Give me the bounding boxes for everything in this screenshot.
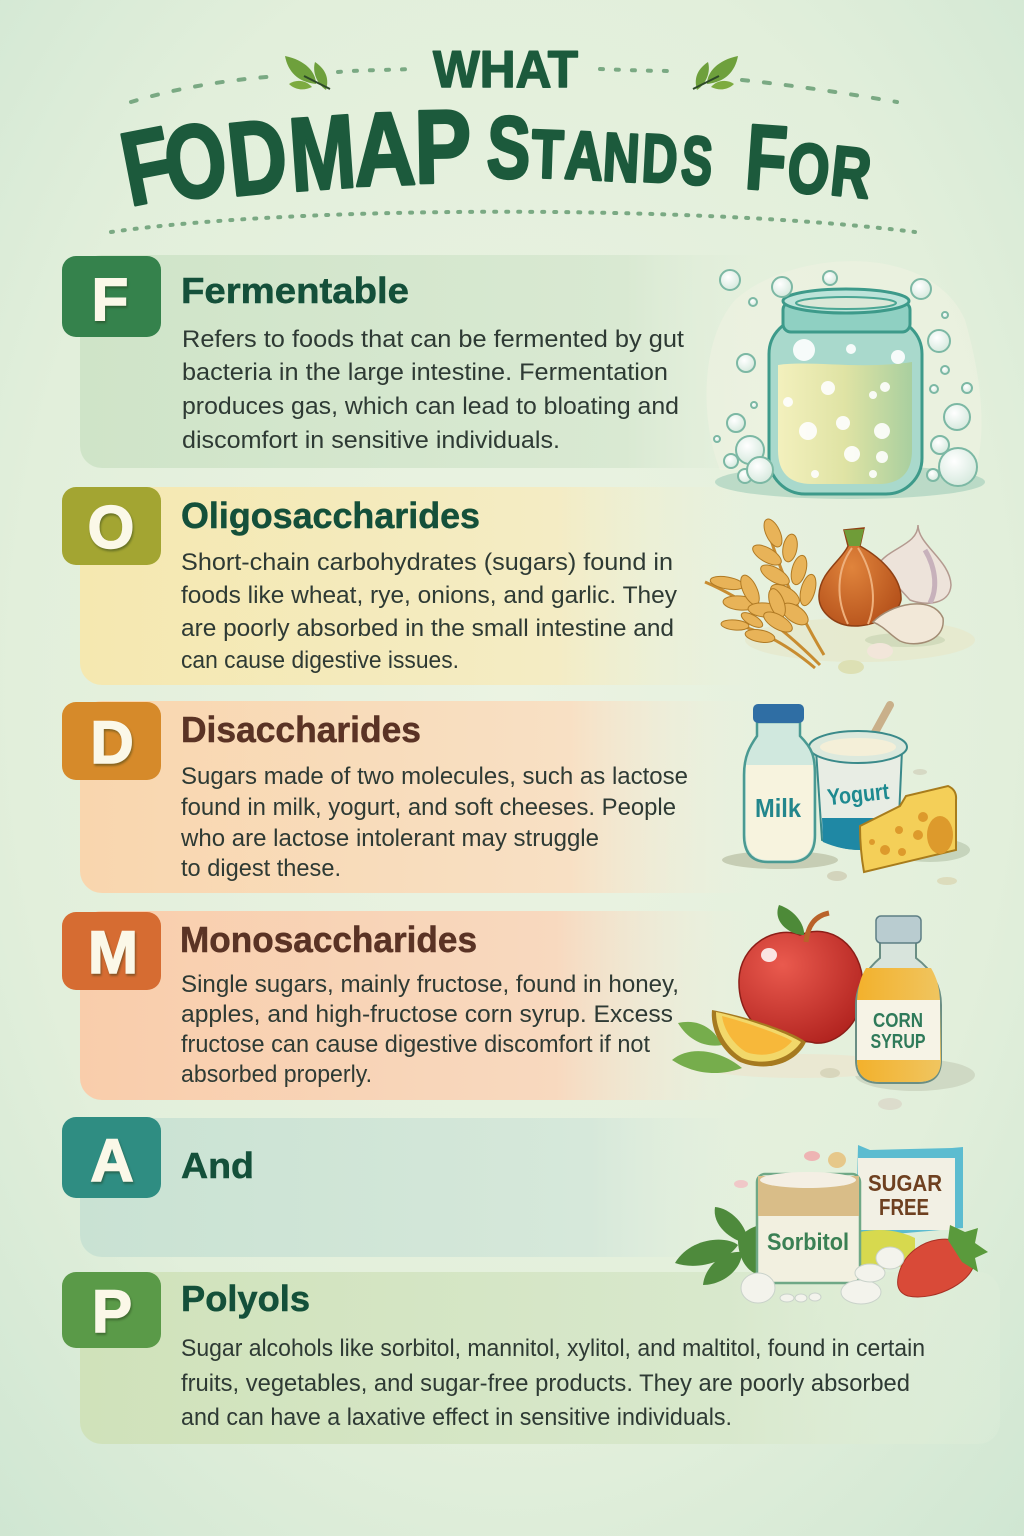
illustration: wheat, onion and garlic — [705, 516, 975, 674]
heading: FODMAP arched letters: P — [413, 89, 472, 206]
heading: Polyols — [181, 1278, 310, 1319]
body text: foods like wheat, rye, onions, and garlic. They — [181, 582, 678, 609]
heading: Disaccharides — [181, 709, 421, 750]
heading: Stands For small caps letters: S — [679, 122, 715, 200]
heading: Stands For small caps letters: S — [485, 99, 532, 198]
panel background — [80, 1272, 1000, 1444]
heading: Stands For small caps letters: T — [530, 115, 565, 193]
sugar free bag: FREE — [879, 1194, 929, 1220]
heading: Stands For small caps letters: R — [827, 132, 875, 214]
heading: FODMAP arched letters — [112, 89, 472, 228]
illustration: sorbitol, sugar free pack, strawberry and tablets — [675, 1145, 988, 1304]
body text: discomfort in sensitive individuals. — [182, 427, 560, 454]
icon: right leaves — [693, 56, 738, 90]
panel background — [80, 911, 760, 1100]
body text: who are lactose intolerant may struggle — [180, 825, 599, 852]
badge D: D — [90, 709, 134, 776]
badge F — [62, 256, 161, 337]
body text: and can have a laxative effect in sensitive individuals. — [181, 1404, 732, 1431]
heading: FODMAP arched letters: A — [352, 91, 417, 209]
corn syrup bottle: CORN — [873, 1010, 923, 1032]
badge D — [62, 702, 161, 780]
decorative dashed arcs — [111, 69, 915, 232]
illustration: apple, lemon wedge and corn syrup — [672, 905, 975, 1110]
panel: M Monosaccharides — [62, 911, 760, 1100]
yogurt cup — [809, 705, 907, 850]
apple — [739, 905, 863, 1043]
sorbitol jar — [757, 1172, 860, 1283]
illustration: milk, yogurt and cheese — [722, 704, 970, 885]
body text: can cause digestive issues. — [181, 647, 459, 674]
body text: apples, and high-fructose corn syrup. Excess — [181, 1001, 673, 1028]
badge O — [62, 487, 161, 565]
heading: Monosaccharides — [180, 919, 477, 960]
heading: Stands For small caps letters: D — [640, 119, 680, 198]
panel background — [80, 487, 760, 685]
body text: bacteria in the large intestine. Fermentation — [182, 359, 668, 386]
wheat — [705, 516, 824, 668]
body text: Refers to foods that can be fermented by gut — [182, 326, 684, 353]
cheese — [860, 786, 956, 872]
heading: FODMAP arched letters: D — [222, 97, 293, 218]
garlic back — [878, 525, 951, 603]
leaves — [672, 1022, 742, 1073]
yellow tin — [860, 1230, 915, 1272]
lemon wedge — [712, 1010, 806, 1066]
panel background — [80, 255, 780, 468]
body text: Sugars made of two molecules, such as lactose — [181, 763, 688, 790]
heading: FODMAP arched letters: F — [112, 104, 182, 228]
body text — [182, 326, 684, 454]
yogurt cup: Yogurt — [826, 778, 891, 810]
body text: absorbed properly. — [181, 1061, 372, 1088]
milk bottle — [744, 704, 815, 862]
heading: Stands For small caps letters: O — [785, 129, 833, 210]
title — [111, 41, 915, 232]
heading: Oligosaccharides — [181, 495, 480, 536]
panel: P Polyols — [62, 1272, 1000, 1444]
badge P — [62, 1272, 161, 1348]
panel: F Fermentable — [62, 255, 780, 468]
body text: produces gas, which can lead to bloating and — [182, 393, 679, 420]
badge M: M — [88, 919, 138, 986]
badge M — [62, 912, 161, 990]
corn syrup bottle: SYRUP — [870, 1031, 926, 1053]
body text — [180, 763, 688, 882]
milk bottle: Milk — [755, 793, 801, 823]
badge F: F — [92, 266, 128, 333]
strawberry — [898, 1225, 988, 1297]
body text: are poorly absorbed in the small intestine and — [181, 615, 674, 642]
heading: And — [181, 1145, 254, 1186]
tablets — [741, 1247, 904, 1304]
body text: Short-chain carbohydrates (sugars) found in — [181, 549, 673, 576]
badge O: O — [88, 494, 134, 561]
panel background — [80, 1118, 760, 1257]
panel: A And — [62, 1117, 760, 1257]
icon: left leaves — [285, 56, 330, 90]
illustration: fermenting jar with bubbles — [706, 261, 985, 499]
panel: D Disaccharides — [62, 701, 760, 893]
body text — [181, 549, 678, 674]
badge P: P — [92, 1278, 132, 1345]
heading: FODMAP arched letters: O — [157, 99, 234, 223]
heading: FODMAP arched letters: M — [285, 92, 359, 213]
heading: Stands For small caps letters: F — [743, 104, 790, 210]
heading: Fermentable — [181, 270, 409, 311]
onion — [819, 528, 901, 626]
sugar free bag — [856, 1145, 963, 1236]
body text: Sugar alcohols like sorbitol, mannitol, xylitol, and maltitol, found in certain — [181, 1335, 925, 1362]
body text: Single sugars, mainly fructose, found in honey, — [181, 971, 679, 998]
heading: Stands For small caps letters: A — [563, 117, 605, 194]
heading: Stands For small caps letters: N — [601, 119, 641, 197]
body text: fruits, vegetables, and sugar-free products. They are poorly absorbed — [181, 1370, 910, 1397]
panel: O Oligosaccharides — [62, 487, 760, 685]
body text: fructose can cause digestive discomfort if not — [181, 1031, 650, 1058]
basil — [675, 1207, 760, 1285]
corn syrup bottle — [856, 916, 941, 1083]
body text: found in milk, yogurt, and soft cheeses. People — [181, 794, 676, 821]
body text — [181, 1335, 925, 1431]
badge A — [62, 1117, 161, 1198]
sorbitol jar: Sorbitol — [767, 1229, 849, 1256]
title word: WHAT: WHAT — [433, 41, 578, 99]
body text — [181, 971, 679, 1088]
heading: Stands For small caps letters — [485, 99, 875, 214]
garlic small — [873, 604, 943, 644]
panel background — [80, 701, 760, 893]
sugar free bag: SUGAR — [868, 1170, 942, 1196]
badge A: A — [90, 1127, 134, 1194]
body text: to digest these. — [181, 855, 341, 882]
